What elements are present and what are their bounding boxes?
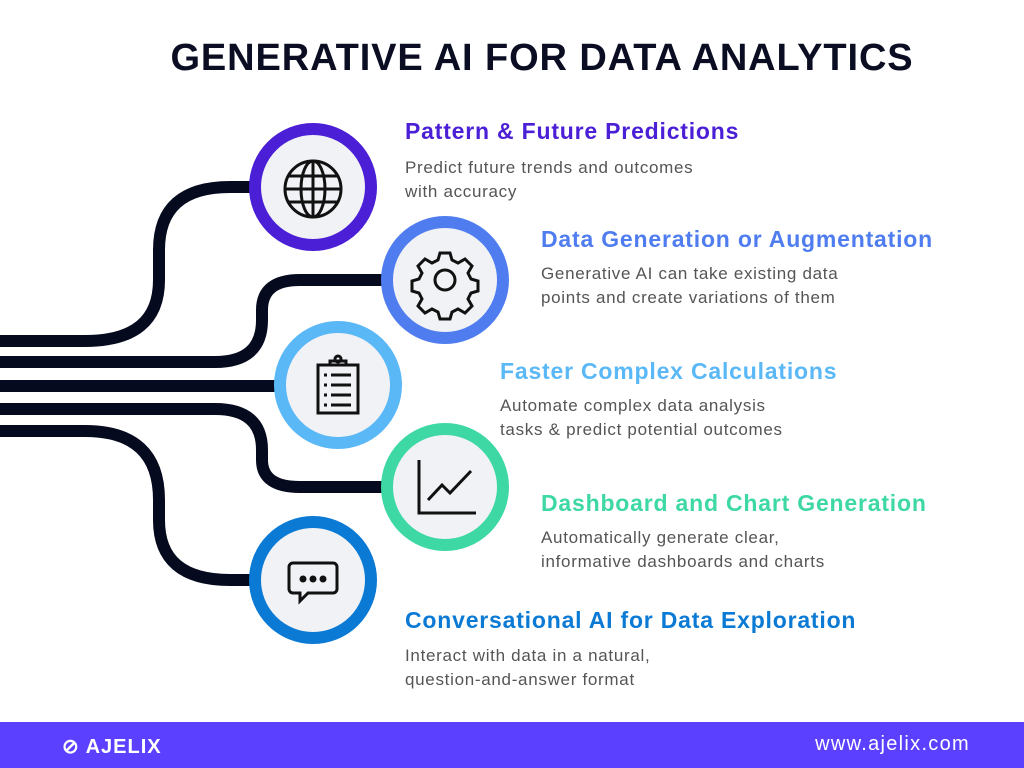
circle 5: chat bubble [255, 522, 371, 638]
logo: ⊘ AJELIX [62, 736, 162, 758]
connector lines [0, 187, 390, 580]
circle 3: clipboard [280, 327, 396, 443]
item 4 text [541, 528, 825, 571]
title: GENERATIVE AI FOR DATA ANALYTICS [170, 37, 914, 79]
item 3 text: Automate complex data analysis [500, 396, 766, 415]
footer [0, 722, 1024, 768]
item 5 text: Interact with data in a natural, [405, 646, 650, 665]
circle 2: gear [387, 222, 503, 338]
item 2 text: Generative AI can take existing data [541, 264, 838, 283]
item 3 text: tasks & predict potential outcomes [500, 420, 783, 439]
item 4 text: Automatically generate clear, [541, 528, 780, 547]
item 1 heading: Pattern & Future Predictions [405, 118, 739, 144]
item 1 text: Predict future trends and outcomes [405, 158, 693, 177]
item 5 text [405, 646, 650, 689]
item 4 heading: Dashboard and Chart Generation [541, 490, 927, 516]
circle 1: globe [255, 129, 371, 245]
item 1 text [405, 158, 693, 201]
item 5 heading: Conversational AI for Data Exploration [405, 607, 856, 633]
item 2 heading: Data Generation or Augmentation [541, 226, 933, 252]
website: www.ajelix.com [815, 733, 970, 755]
item 2 text: points and create variations of them [541, 288, 836, 307]
item 5 text: question-and-answer format [405, 670, 635, 689]
circle 4: line chart [387, 429, 503, 545]
item 4 text: informative dashboards and charts [541, 552, 825, 571]
item 3 text [500, 396, 783, 439]
item 3 heading: Faster Complex Calculations [500, 358, 837, 384]
item 1 text: with accuracy [405, 182, 517, 201]
item 2 text [541, 264, 838, 307]
